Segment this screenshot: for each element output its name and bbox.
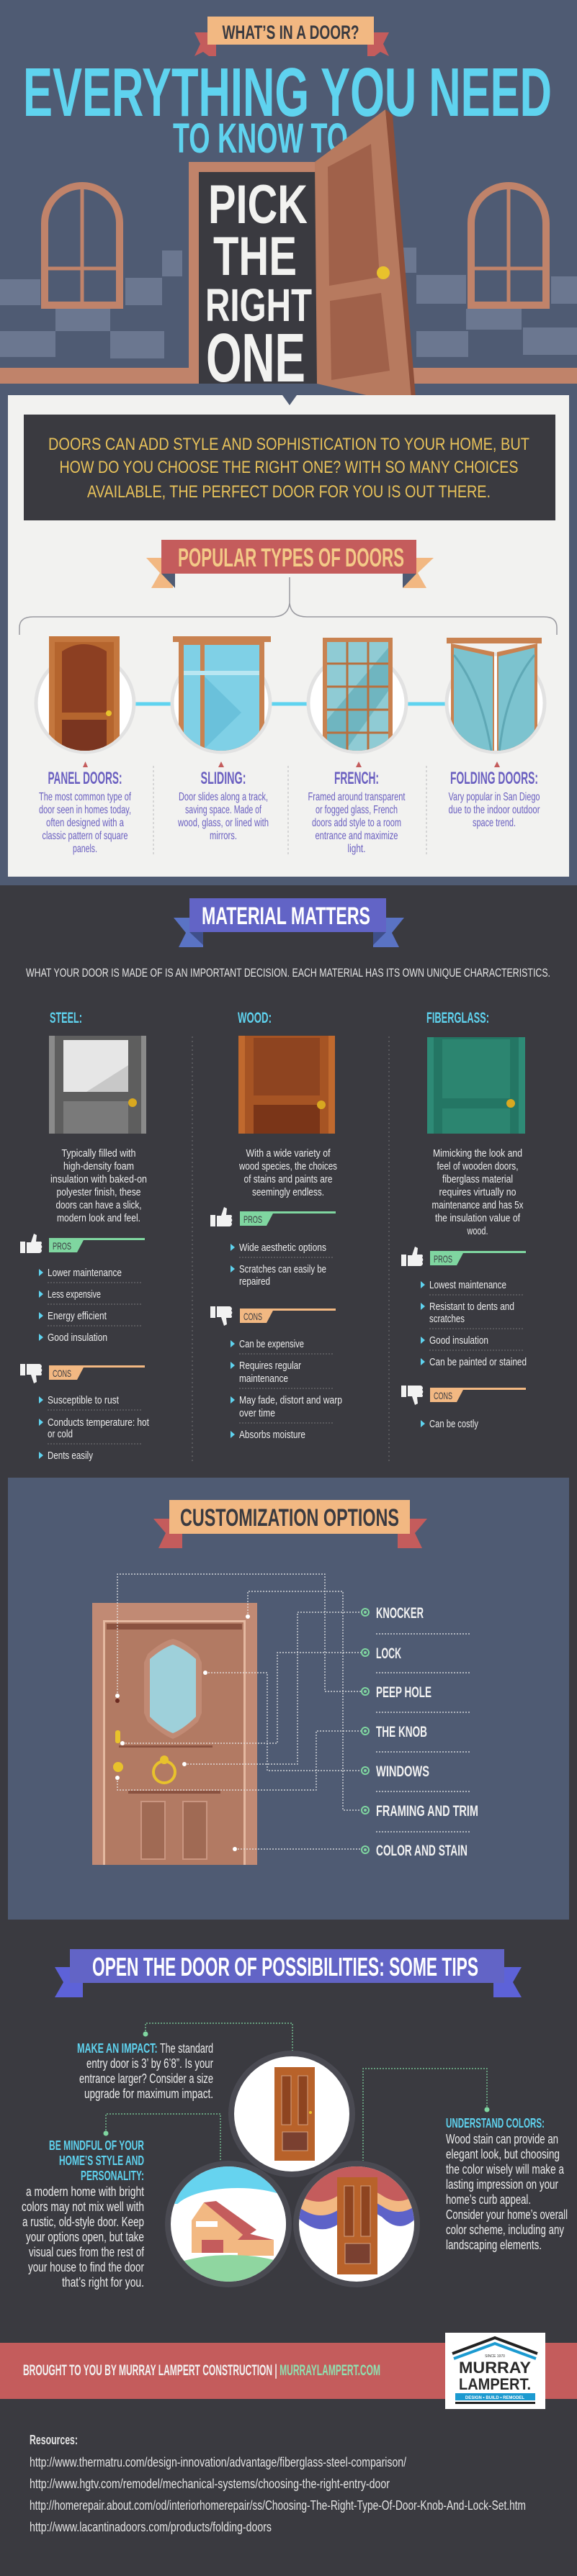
tip circle: paint door [293,2161,423,2290]
footer credit band [0,2343,577,2399]
tip leader lines [106,2023,487,2161]
resources: http://www.thermatru.com/design-innovation/advantage/fiberglass-steel-comparison/ [30,2455,406,2469]
column: wood: Can be expensive [239,1338,304,1350]
type: panel doors: door seen in homes today, [39,804,131,816]
connectors [133,702,448,705]
tip circle: house [165,2161,292,2287]
title: TO KNOW TO [173,115,348,162]
customization panel [8,1478,569,1920]
banner: material matters [174,898,404,947]
bracket [19,577,557,635]
column: fiberglass: Good insulation [429,1334,488,1347]
tip: understand colors [446,2116,568,2252]
type: sliding [177,769,269,842]
logo: LAMPERT. [459,2375,531,2393]
tip: be mindful: that’s right for you. [62,2275,144,2290]
intro text box: AVAILABLE, THE PERFECT DOOR FOR YOU IS OUT THERE. [87,482,491,502]
tip: make an impact: upgrade for maximum impact. [84,2087,213,2101]
tip: understand colors: landscaping elements. [446,2238,542,2252]
column: steel: Susceptible to rust [48,1394,120,1406]
column: wood: PROS [243,1214,262,1225]
badge: what's in a door [194,17,389,56]
banner: customization: CUSTOMIZATION OPTIONS [180,1504,399,1532]
customization leader lines [117,1574,470,1849]
column: steel: high-density foam [63,1160,134,1172]
banner: material matters: MATERIAL MATTERS [202,903,370,930]
type: panel doors: often designed with a [46,817,124,829]
column: wood: Scratches can easily be [239,1263,326,1275]
type: panel doors: The most common type of [39,791,131,803]
column: steel: CONS [53,1368,71,1379]
wood door image [238,1036,335,1134]
column: steel: Dents easily [48,1450,93,1462]
tip: be mindful [22,2138,145,2290]
column: fiberglass: maintenance and has 5x [432,1199,524,1211]
logo: MURRAY [459,2359,531,2377]
column: fiberglass: Lowest maintenance [429,1279,506,1291]
open door [315,109,416,407]
column: wood: Absorbs moisture [239,1429,305,1441]
column: wood: CONS [243,1311,262,1322]
column: fiberglass: PROS [434,1253,452,1265]
column: wood: WOOD: [238,1010,272,1026]
column: wood: Requires regular [239,1360,301,1372]
column: steel: Conducts temperature: hot [48,1416,150,1429]
dashed dividers [153,766,426,855]
column: fiberglass: FIBERGLASS: [426,1010,489,1026]
tip: be mindful: a rustic, old-style door. Keep [22,2215,144,2229]
logo [445,2333,545,2409]
resources [30,2433,526,2534]
intro text box [24,415,555,520]
column: wood: of stains and paints are [243,1173,333,1185]
door: folding [451,643,537,760]
column: fiberglass: Mimicking the look and [433,1147,522,1160]
type: french: entrance and maximize [316,830,398,842]
customization labels: LOCK [376,1645,401,1662]
column: fiberglass: Can be costly [429,1418,478,1430]
column: steel: Lower maintenance [48,1267,122,1279]
customization labels: KNOCKER [376,1605,424,1622]
tip circle: door [228,2051,355,2177]
column: steel: polyester finish, these [56,1186,141,1198]
type: sliding: Door slides along a track, [179,791,268,803]
column: fiberglass: Resistant to dents and [429,1301,514,1313]
customization labels: FRAMING AND TRIM [376,1803,478,1820]
tip: make an impact: entry door is 3’ by 6’8”. Is your [86,2056,213,2071]
type triangles [83,761,500,767]
column: steel [20,1010,150,1462]
column: wood: wood species, the choices [238,1160,337,1172]
column: steel: Good insulation [48,1332,107,1344]
tip: be mindful: your options open, but take [26,2230,144,2244]
type: sliding: SLIDING: [200,769,246,788]
type: sliding: wood, glass, or lined with [177,817,269,829]
customization labels: THE KNOB [376,1724,427,1740]
type: panel doors [39,769,131,855]
type: folding: due to the indoor outdoor [448,804,540,816]
column: fiberglass: fiberglass material [442,1173,513,1185]
column: fiberglass: the insulation value of [435,1212,521,1224]
door frame with pick the right one: THE [213,226,297,287]
fiberglass door image [427,1037,525,1134]
banner: popular types: POPULAR TYPES OF DOORS [178,543,404,572]
type: french: light. [347,843,366,855]
resources: http://www.lacantinadoors.com/products/folding-doors [30,2520,272,2534]
logo: SINCE 1970 [485,2354,505,2359]
type: french: doors add style to a room [312,817,401,829]
column: steel: Less expensive [48,1288,101,1301]
tip: make an impact [77,2041,213,2101]
type: french [308,769,406,855]
column: wood: Wide aesthetic options [239,1242,326,1254]
column: steel: STEEL: [50,1010,82,1026]
logo: DESIGN • BUILD • REMODEL [465,2396,524,2400]
column: fiberglass: requires virtually no [439,1186,516,1198]
type: folding: space trend. [473,817,516,829]
banner: popular types [146,540,434,588]
column: steel: insulation with baked-on [50,1173,147,1185]
door frame with pick the right one: PICK [208,174,308,235]
door frame with pick the right one [189,162,318,397]
column: steel: Typically filled with [62,1147,135,1160]
tip: understand colors: home’s curb appeal. [446,2192,531,2207]
column: steel: PROS [53,1240,71,1252]
customization labels [362,1605,478,1859]
door: french [323,638,393,760]
column: steel: modern look and feel. [57,1212,140,1224]
tip: be mindful: colors may not mix well with [22,2200,144,2214]
type: panel doors: classic pattern of square [42,830,128,842]
type: french: FRENCH: [334,769,379,788]
column: wood: over time [239,1407,275,1419]
column: fiberglass: Can be painted or stained [429,1356,527,1368]
tip: be mindful: BE MINDFUL OF YOUR [49,2138,144,2153]
door: sliding [179,641,264,760]
customization labels: PEEP HOLE [376,1684,431,1701]
tip: make an impact: MAKE AN IMPACT: The standard [77,2041,213,2056]
header background [0,0,577,885]
column: fiberglass: feel of wooden doors, [437,1160,519,1172]
type: sliding: saving space. Made of [185,804,261,816]
column: wood: maintenance [239,1373,288,1385]
column: fiberglass: scratches [429,1313,465,1325]
tip: be mindful: HOME’S STYLE AND [59,2154,144,2168]
column: steel: Energy efficient [48,1310,107,1322]
tip: be mindful: a modern home with bright [26,2184,144,2199]
column: wood [210,1010,342,1441]
resources: http://www.hgtv.com/remodel/mechanical-systems/choosing-the-right-entry-door [30,2477,390,2491]
door frame with pick the right one: ONE [206,320,305,397]
type: sliding: mirrors. [210,830,237,842]
dark section [0,885,577,2576]
type: panel doors: panels. [73,843,97,855]
customization labels: COLOR AND STAIN [376,1843,468,1859]
type: french: Framed around transparent [308,791,406,803]
type: panel doors: PANEL DOORS: [48,769,122,788]
footer credit band: BROUGHT TO YOU BY MURRAY LAMPERT CONSTRUCTION | MURRAYLAMPERT.COM [23,2362,380,2379]
bricks [0,248,577,358]
tip: be mindful: visual cues from the rest of [29,2245,145,2259]
column: fiberglass: wood. [467,1225,488,1237]
column: wood: repaired [239,1275,270,1288]
column: steel: doors can have a slick, [56,1199,141,1211]
tip: be mindful: your house to find the door [28,2260,144,2274]
window right [471,186,546,305]
banner: tips [55,1949,522,1997]
column: fiberglass [401,1010,527,1430]
type: french: or fogged glass, French [316,804,398,816]
column: fiberglass: CONS [434,1390,452,1401]
tip: make an impact: entrance larger? Consider a size [79,2071,213,2086]
badge: what's in a door: WHAT’S IN A DOOR? [222,22,359,43]
title [23,54,552,162]
resources: Resources: [30,2433,78,2447]
window left [45,186,120,305]
column: wood: seemingly endless. [252,1186,324,1198]
custom door [92,1603,257,1865]
column: wood: With a wide variety of [246,1147,331,1160]
ground line [0,368,577,384]
door circles [36,654,545,752]
column: wood: May fade, distort and warp [239,1394,342,1406]
banner: customization [153,1500,427,1548]
customization labels: WINDOWS [376,1763,429,1780]
column: steel: or cold [48,1428,73,1440]
type: folding [448,769,540,829]
tip: be mindful: PERSONALITY: [81,2169,144,2183]
door: panel [49,636,120,759]
intro white panel [8,395,569,877]
door frame with pick the right one: RIGHT [205,279,312,331]
steel door image [49,1036,146,1134]
